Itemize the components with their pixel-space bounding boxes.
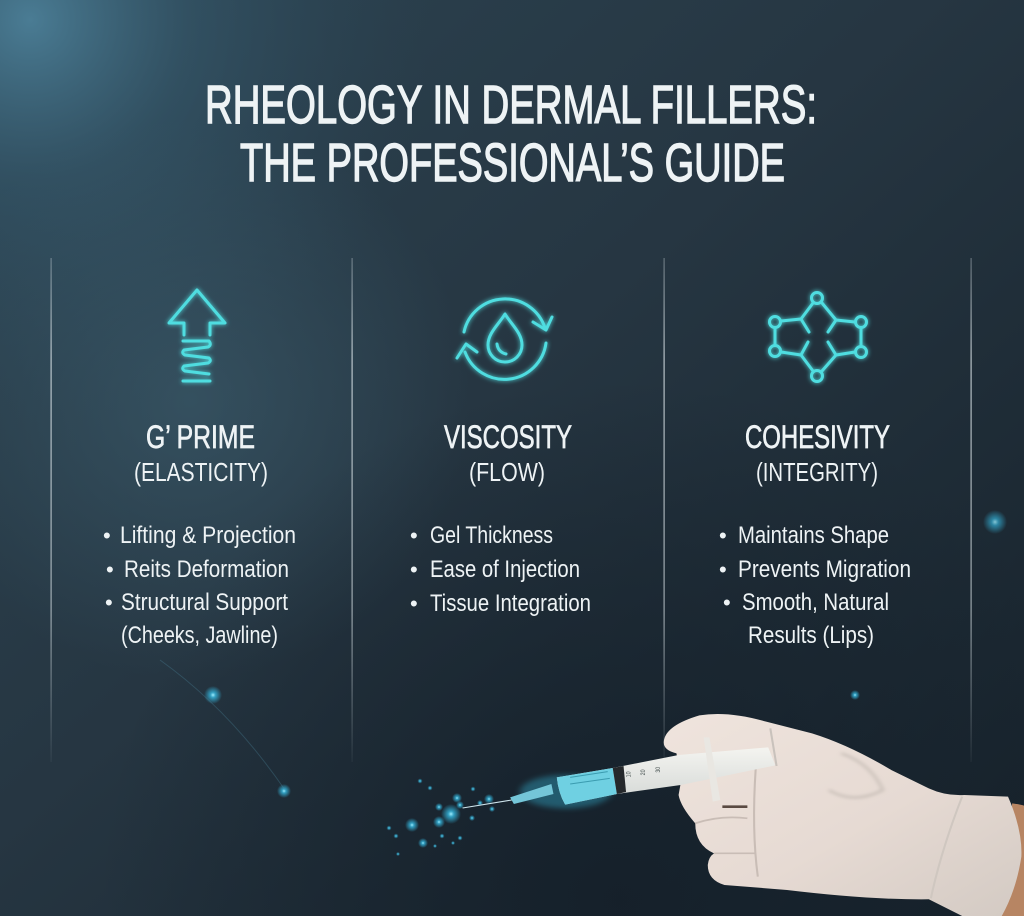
decorative light dots: [160, 510, 1007, 798]
bullet list: •: [410, 557, 418, 582]
heading: VISCOSITY: [444, 419, 572, 455]
glove: [664, 714, 1024, 916]
bullet list: Ease of Injection: [430, 556, 580, 583]
panel: viscosity: [410, 299, 591, 617]
bullet list: [410, 522, 591, 617]
bullet list: [103, 522, 296, 649]
title: THE PROFESSIONAL’S GUIDE: [240, 133, 785, 193]
bullet list: Structural Support: [121, 589, 288, 616]
bullet list: Lifting & Projection: [120, 522, 296, 549]
bullet list: Results (Lips): [748, 622, 874, 649]
panel: cohesivity: [719, 292, 911, 649]
bullet list: •: [719, 523, 727, 548]
subheading: (INTEGRITY): [756, 457, 878, 487]
panel: G' prime: [103, 290, 296, 649]
bullet list: Tissue Integration: [430, 590, 591, 617]
syringe: [463, 737, 775, 808]
bullet list: Maintains Shape: [738, 522, 889, 549]
syringe: 10: [626, 771, 633, 777]
icon: arrow and spring: [169, 290, 225, 381]
subheading: (ELASTICITY): [134, 457, 268, 487]
bullet list: •: [410, 523, 418, 548]
title: [205, 75, 817, 193]
heading: G’ PRIME: [146, 419, 255, 455]
bullet list: [719, 522, 911, 649]
syringe: 20: [641, 769, 647, 775]
particle spray: [386, 778, 495, 856]
bullet list: (Cheeks, Jawline): [121, 622, 278, 649]
column dividers: [50, 258, 972, 762]
heading: COHESIVITY: [745, 419, 890, 455]
bullet list: •: [410, 591, 418, 616]
bullet list: •: [723, 590, 731, 615]
illustration: gloved hand with syringe: [463, 714, 1024, 916]
bullet list: Gel Thickness: [430, 522, 553, 549]
bullet list: •: [719, 557, 727, 582]
bullet list: •: [105, 590, 113, 615]
bullet list: Reits Deformation: [124, 556, 289, 583]
bullet list: Smooth, Natural: [742, 589, 889, 616]
icon: molecule network: [770, 292, 866, 382]
syringe: 30: [656, 766, 662, 773]
bullet list: •: [106, 557, 114, 582]
icon: drop in cycle arrows: [457, 299, 552, 379]
bullet list: Prevents Migration: [738, 556, 911, 583]
subheading: (FLOW): [469, 457, 545, 487]
bullet list: •: [103, 523, 111, 548]
